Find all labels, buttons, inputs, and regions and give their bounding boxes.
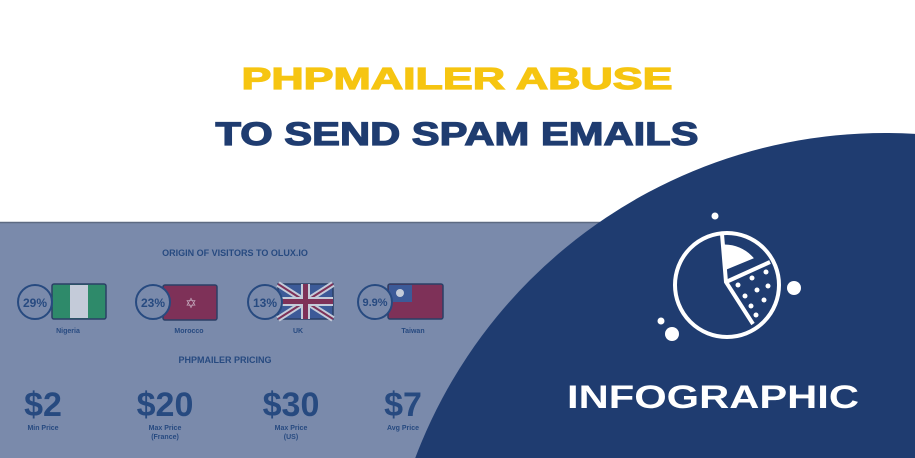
flag: Morocco: 23% (141, 296, 165, 310)
flag: Nigeria: Nigeria (56, 328, 80, 335)
title (216, 61, 698, 152)
prices: $20 (137, 386, 193, 424)
flag: Morocco (136, 285, 217, 335)
prices: Min Price (27, 425, 59, 432)
flag: Nigeria: 29% (23, 296, 47, 310)
flag: Taiwan: 9.9% (362, 297, 388, 309)
flag: Morocco: ✡ (185, 295, 197, 311)
flag: UK (248, 284, 333, 335)
flag: Taiwan (358, 284, 443, 335)
flag: Morocco: Morocco (174, 328, 204, 335)
prices: Max Price (149, 425, 181, 432)
label: INFOGRAPHIC: INFOGRAPHIC (567, 379, 859, 415)
big navy circle (383, 133, 915, 458)
prices: Max Price (275, 425, 307, 432)
heading: pricing: PHPMAILER PRICING (178, 355, 272, 365)
panel: faded infographic preview (0, 222, 600, 458)
title: TO SEND SPAM EMAILS (216, 116, 698, 152)
icon: pie chart (658, 212, 801, 341)
prices (24, 386, 422, 441)
flag: UK: 13% (253, 296, 277, 310)
title: PHPMAILER ABUSE (242, 61, 672, 96)
prices: $7 (384, 386, 422, 424)
flag: UK: UK (293, 328, 303, 335)
flag: Taiwan: Taiwan (401, 328, 425, 335)
prices: (US) (284, 434, 298, 441)
prices: $2 (24, 386, 62, 424)
prices: $30 (263, 386, 319, 424)
heading: origin of visitors: ORIGIN OF VISITORS TO OLUX.IO (162, 248, 308, 258)
flag: Nigeria (18, 284, 106, 335)
prices: (France) (151, 434, 179, 441)
prices: Avg Price (387, 425, 419, 432)
